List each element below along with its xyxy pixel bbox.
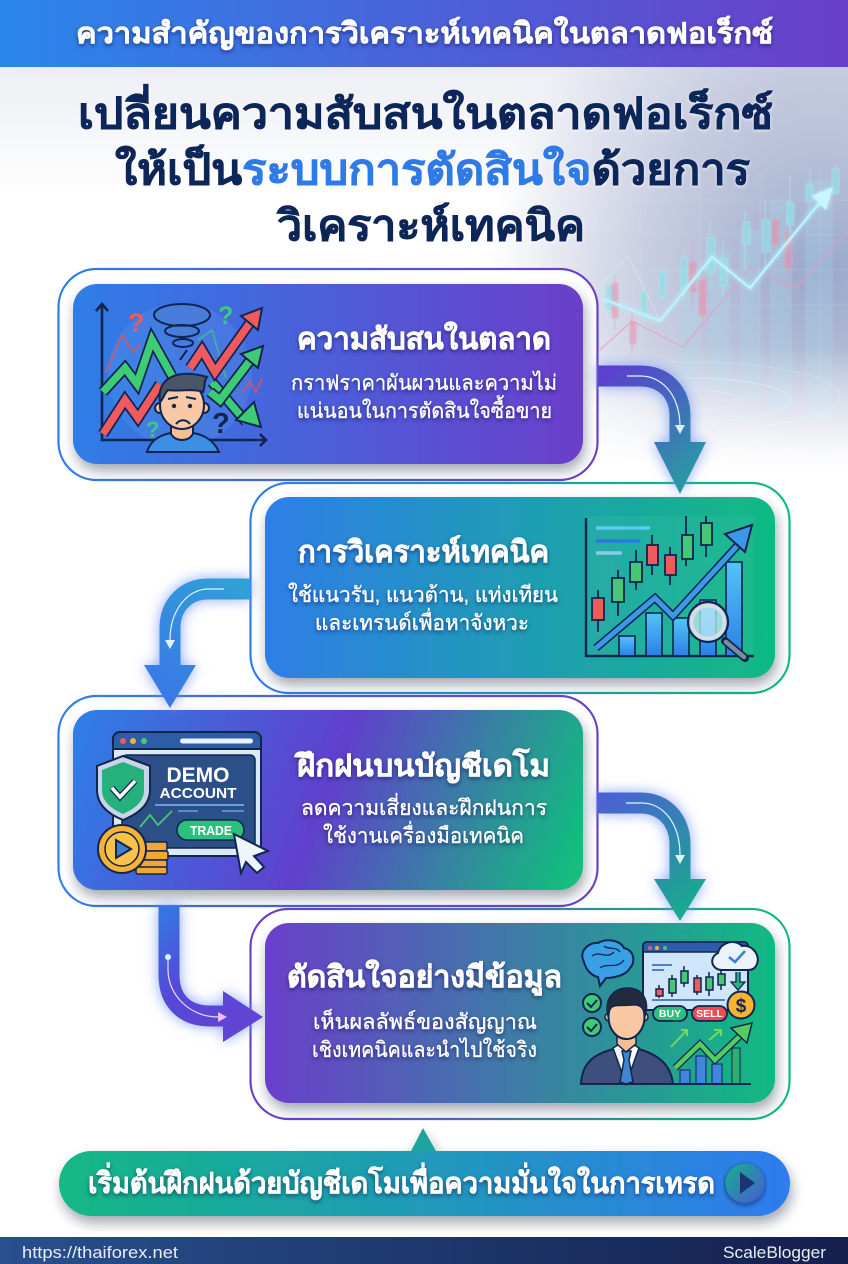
- candles: [592, 516, 712, 632]
- green rising arrow: [210, 358, 252, 400]
- footer: https://thaiforex.net: [22, 1243, 178, 1262]
- icon: confused trader with tangled charts: ?: [146, 417, 159, 442]
- icon: confused trader with tangled charts: ?: [212, 408, 230, 440]
- growth bars and arrow: [680, 1048, 740, 1084]
- headline: วิเคราะห์เทคนิค: [275, 202, 585, 249]
- checks: [583, 994, 601, 1012]
- icon: confused trader with tangled charts: ?: [218, 302, 233, 330]
- description: และเทรนด์เพื่อหาจังหวะ: [315, 608, 529, 635]
- background: rising forex chart: [0, 67, 848, 467]
- icon: demo account window: TRADE: [190, 823, 232, 838]
- chart axes: [96, 304, 266, 446]
- green falling arrow: [212, 382, 246, 422]
- chart window: [643, 942, 748, 1010]
- description: เห็นผลลัพธ์ของสัญญาณ: [313, 1007, 537, 1034]
- description: [291, 370, 557, 423]
- question marks: ?: [128, 308, 144, 338]
- description: [301, 793, 547, 848]
- top banner: [0, 0, 848, 67]
- call to action pill: เริ่มต้นฝึกฝนด้วยบัญชีเดโมเพื่อความมั่นใจในการเทรด: [88, 1162, 715, 1201]
- icon: trader with brain, signals and growth: SELL: [696, 1008, 723, 1020]
- icon: confused trader with tangled charts: [96, 302, 266, 452]
- title: ตัดสินใจอย่างมีข้อมูล: [287, 959, 562, 996]
- icon: trader with brain, signals and growth: $: [736, 996, 747, 1017]
- rising arrow: [596, 545, 738, 648]
- arrow: demo to decision lower: [165, 906, 263, 1042]
- headline: [78, 84, 773, 249]
- top banner: ความสำคัญของการวิเคราะห์เทคนิคในตลาดฟอเร็กซ์: [76, 15, 773, 51]
- arrow: analysis to demo: [144, 589, 250, 708]
- cursor: [234, 834, 268, 873]
- shield: [97, 756, 150, 820]
- magnifier: [725, 641, 745, 658]
- volume bars: [619, 562, 742, 656]
- icon: trader with brain, signals and growth: [581, 940, 758, 1084]
- description: กราฟราคาผันผวนและความไม่: [291, 370, 557, 395]
- icon: play button: [725, 1163, 765, 1203]
- description: [312, 1007, 537, 1062]
- icon: candlestick chart with magnifier: [585, 516, 754, 658]
- coins: [136, 842, 168, 874]
- description: แน่นอนในการตัดสินใจซื้อขาย: [297, 395, 552, 423]
- title: การวิเคราะห์เทคนิค: [298, 535, 549, 569]
- panel: demo account practice: [58, 696, 598, 906]
- trader: [147, 432, 219, 452]
- icon: demo account window: [97, 732, 268, 874]
- title: ฝึกฝนบนบัญชีเดโม: [293, 747, 550, 784]
- footer: [0, 1237, 848, 1264]
- tornado: [154, 304, 210, 360]
- description: ใช้งานเครื่องมือเทคนิค: [323, 821, 524, 848]
- description: ใช้แนวรับ, แนวต้าน, แท่งเทียน: [288, 582, 558, 607]
- description: [288, 582, 558, 635]
- businessman: [581, 1045, 673, 1084]
- icon: demo account window: DEMO: [166, 764, 230, 787]
- cloud: [712, 942, 758, 970]
- description: ลดความเสี่ยงและฝึกฝนการ: [301, 793, 547, 820]
- buy and sell buttons: [653, 1006, 687, 1021]
- footer: ScaleBlogger: [723, 1243, 826, 1262]
- description: เชิงเทคนิคและนำไปใช้จริง: [312, 1037, 537, 1062]
- panel: technical analysis: [250, 483, 790, 693]
- brain: [582, 940, 633, 986]
- arrow: demo to decision: [598, 803, 706, 921]
- panel: informed decision: [250, 909, 790, 1119]
- arrow: confusion to analysis: [598, 376, 706, 494]
- headline: ให้เป็นระบบการตัดสินใจ ด้วยการ: [115, 144, 750, 193]
- green zigzag: [103, 340, 172, 392]
- headline: เปลี่ยนความสับสนในตลาดฟอเร็กซ์: [78, 84, 773, 137]
- icon: demo account window: ACCOUNT: [160, 785, 236, 802]
- title: ความสับสนในตลาด: [297, 321, 551, 356]
- dollar coin: [728, 992, 754, 1018]
- call to action pill: [59, 1128, 790, 1216]
- icon: trader with brain, signals and growth: BUY: [659, 1008, 681, 1020]
- panel: market confusion: [58, 269, 598, 480]
- red rising arrow: [190, 320, 252, 372]
- red zigzag: [103, 384, 160, 434]
